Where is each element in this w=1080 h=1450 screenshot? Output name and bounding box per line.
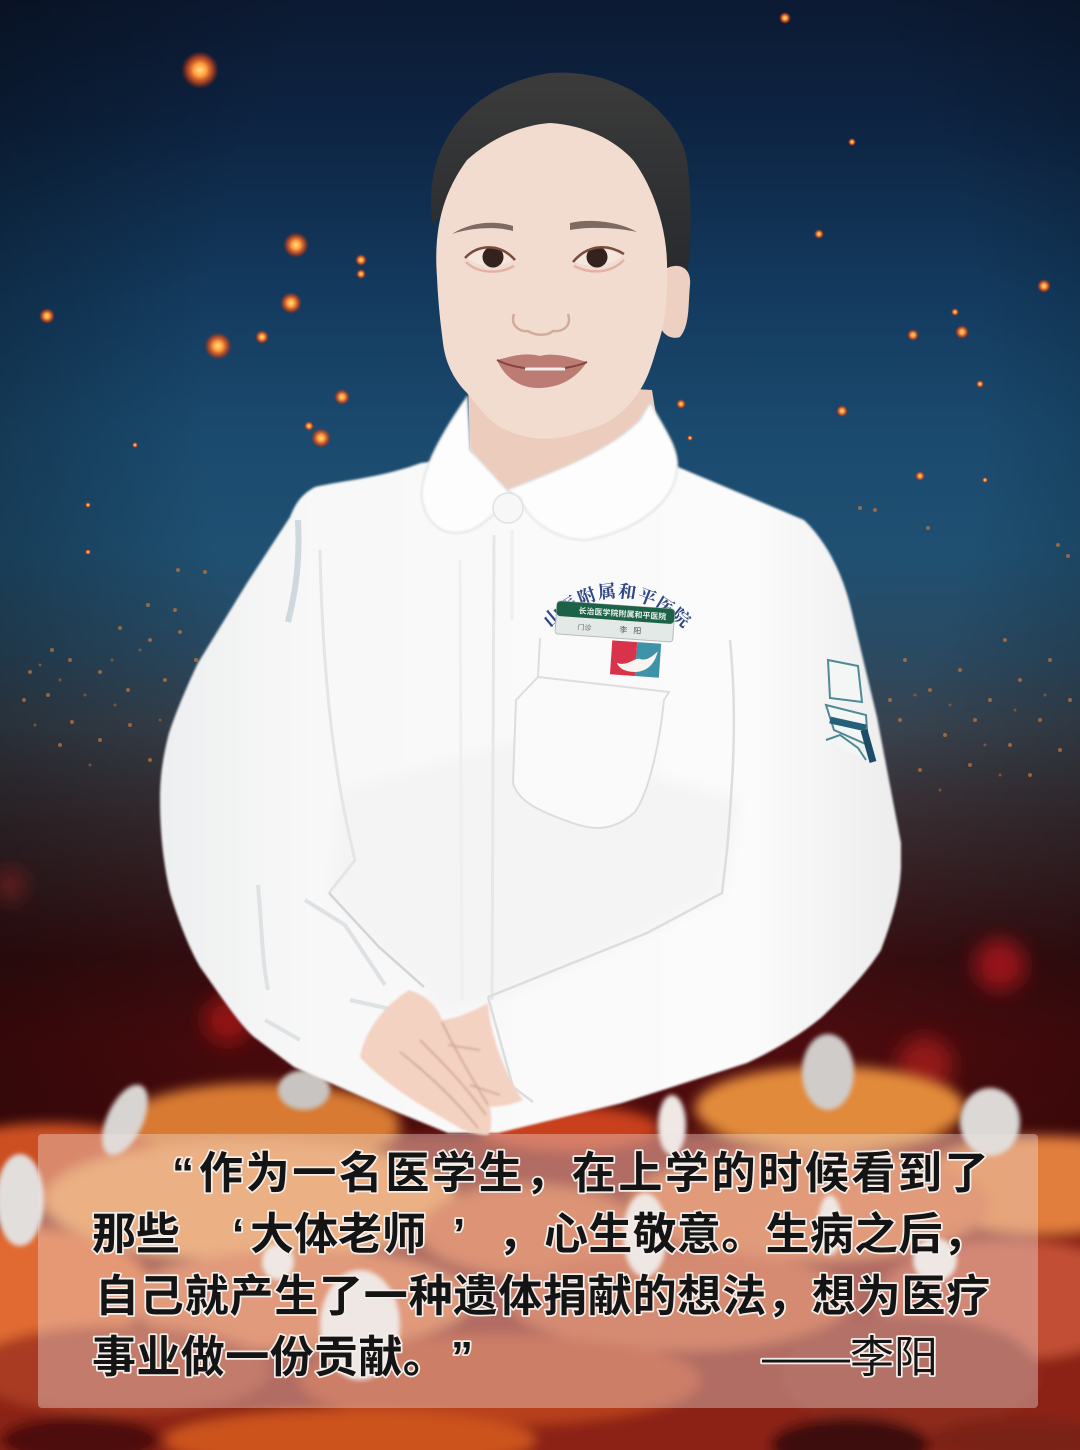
- name badge: 门诊: [577, 622, 592, 632]
- candles in the foreground: [0, 1034, 1080, 1450]
- quote text: ，: [498, 1210, 542, 1259]
- quote text: 事业做一份贡献。: [92, 1333, 447, 1382]
- quote text: 那些: [92, 1210, 180, 1259]
- white coat: [160, 445, 901, 1133]
- person: nurse in white coat: [158, 72, 903, 1136]
- quote text: [92, 1149, 991, 1382]
- collar: [422, 397, 677, 540]
- quote text: ‘: [232, 1210, 244, 1259]
- quote text: ”: [451, 1333, 473, 1382]
- quote text: “: [172, 1149, 194, 1198]
- embroidery: hospital name: 山医附属和平医院: [544, 582, 692, 628]
- name badge: 长治医学院附属和平医院: [578, 605, 667, 622]
- breast pocket: [513, 638, 669, 828]
- name badge: 李阳: [619, 624, 648, 636]
- floating sky lanterns: [0, 12, 1070, 1093]
- sleeve emblem: [826, 660, 873, 762]
- ear: [660, 266, 690, 338]
- neck: [468, 380, 660, 500]
- hospital logo patch: [610, 640, 661, 678]
- quote text: 作为一名医学生，在上学的时候看到了: [199, 1149, 991, 1198]
- quote text: 大体老师: [250, 1210, 426, 1259]
- facial features: [452, 221, 637, 388]
- hair: [431, 73, 691, 300]
- collar button: [493, 493, 523, 523]
- quote text: 自己就产生了一种遗体捐献的想法，想为医疗: [95, 1272, 991, 1321]
- quote text: ’: [453, 1210, 465, 1259]
- quote panel: [38, 1134, 1038, 1408]
- coat folds and shading: [258, 520, 740, 1102]
- face: [436, 123, 667, 439]
- hands: [360, 990, 523, 1135]
- quote attribution: ——李阳: [762, 1333, 938, 1382]
- name badge: [555, 601, 675, 642]
- quote text: 心生敬意。生病之后，: [544, 1210, 987, 1259]
